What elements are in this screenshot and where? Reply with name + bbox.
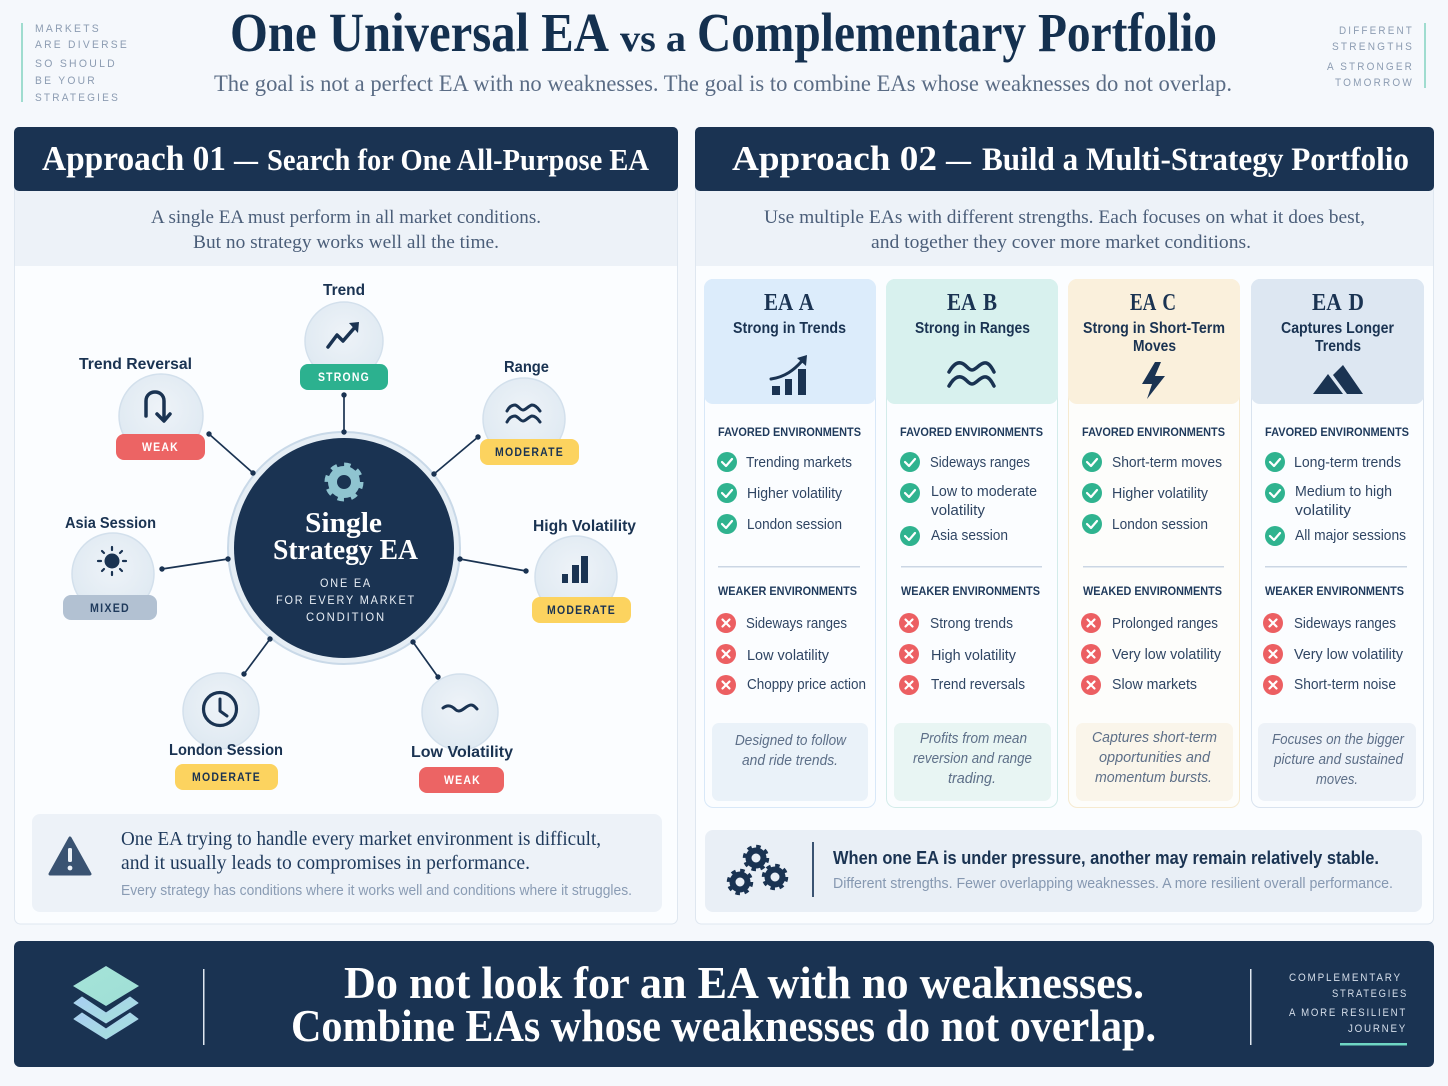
approach 01 description	[151, 207, 541, 253]
icon: trend arrow	[328, 322, 359, 347]
title: One Universal EA	[230, 2, 609, 63]
icon: rising bars	[771, 355, 807, 395]
footer side note: A MORE RESILIENT	[1289, 1007, 1407, 1019]
card: EA D: moves.	[1316, 772, 1358, 788]
card: EA C: WEAKED ENVIRONMENTS	[1083, 586, 1222, 598]
right side note: TOMORROW	[1335, 77, 1414, 89]
right side note: STRENGTHS	[1332, 41, 1414, 53]
card: EA D: Very low volatility	[1294, 646, 1403, 663]
node: trend reversal: Trend Reversal	[79, 356, 192, 373]
approach 02 heading: Build a Multi-Strategy Portfolio	[982, 142, 1409, 178]
central hub: single strategy EA: CONDITION	[306, 610, 386, 624]
card: EA A: Strong in Trends	[733, 320, 846, 337]
approach 01 description: But no strategy works well all the time.	[193, 232, 499, 253]
callout: warning	[32, 814, 662, 912]
title: vs a	[620, 18, 686, 60]
card: EA B	[886, 279, 1058, 808]
node: asia session: Asia Session	[65, 515, 156, 532]
approach 01 heading: Search for One All-Purpose EA	[267, 142, 650, 177]
node: high volatility: High Volatility	[533, 518, 636, 535]
card: EA C: EA C	[1130, 290, 1176, 316]
card: EA D: All major sessions	[1295, 527, 1406, 544]
card: EA B: Strong in Ranges	[915, 320, 1030, 337]
card: EA C: London session	[1112, 516, 1208, 533]
node: high volatility: MODERATE	[547, 603, 616, 617]
icon: low wave	[443, 705, 477, 711]
node: range: Range	[504, 359, 549, 376]
card: EA A: London session	[747, 516, 842, 533]
card: EA C: Captures short-term	[1092, 730, 1217, 746]
right side note: DIFFERENT	[1339, 25, 1414, 37]
right side note	[1327, 23, 1426, 89]
icon: bars	[562, 556, 588, 583]
node: low volatility: WEAK	[444, 773, 481, 787]
callout: warning: Every strategy has conditions where it works well and conditions where it struggles.	[121, 883, 632, 899]
footer message: Combine EAs whose weaknesses do not overlap.	[291, 1000, 1156, 1051]
icon: three gears	[728, 846, 786, 894]
central hub: single strategy EA: Single	[305, 507, 382, 539]
icon: range waves	[507, 405, 540, 422]
footer message	[291, 957, 1156, 1051]
card: EA D: Sideways ranges	[1294, 615, 1396, 632]
card: EA C: opportunities and	[1099, 750, 1211, 766]
card: EA A: Low volatility	[747, 647, 829, 664]
card: EA D: EA D	[1312, 290, 1364, 316]
approach 02 heading: —	[945, 144, 972, 177]
approach 02 description: and together they cover more market conditions.	[871, 232, 1251, 253]
card: EA A: Sideways ranges	[746, 615, 847, 632]
title: Complementary Portfolio	[697, 2, 1217, 63]
callout: resilience	[705, 830, 1422, 912]
node: trend	[300, 282, 388, 390]
subtitle: The goal is not a perfect EA with no weaknesses. The goal is to combine EAs whose weaknesses do not overlap.	[214, 71, 1232, 96]
icon: hub gear	[327, 465, 361, 499]
node: london session: London Session	[169, 742, 283, 759]
icon: u-turn arrow	[146, 392, 170, 421]
card: EA B: WEAKER ENVIRONMENTS	[901, 586, 1040, 598]
left side note	[21, 23, 129, 104]
icon: sun	[98, 547, 126, 575]
card: EA A: Choppy price action	[747, 676, 866, 693]
card: EA D: Trends	[1315, 338, 1361, 355]
central hub: single strategy EA: Strategy EA	[273, 534, 418, 566]
icon: waves	[949, 363, 994, 386]
node: trend reversal: WEAK	[142, 440, 179, 454]
icon: mountains	[1313, 365, 1363, 394]
footer side note: COMPLEMENTARY	[1289, 972, 1402, 984]
central hub: single strategy EA: ONE EA	[320, 576, 372, 590]
approach 01 description: A single EA must perform in all market conditions.	[151, 207, 541, 228]
node: trend: Trend	[323, 282, 365, 299]
connector lines	[159, 392, 529, 680]
card: EA D: WEAKER ENVIRONMENTS	[1265, 586, 1404, 598]
card: EA D: Medium to high	[1295, 483, 1392, 500]
node: range	[480, 359, 579, 465]
card: EA B: volatility	[931, 502, 985, 519]
approach 01 heading: —	[233, 144, 259, 177]
card: EA C: Short-term moves	[1112, 454, 1222, 471]
card: EA B: Sideways ranges	[930, 454, 1030, 471]
node: asia session	[63, 515, 157, 620]
card: EA D: Short-term noise	[1294, 676, 1396, 693]
card: EA A: WEAKER ENVIRONMENTS	[718, 586, 857, 598]
card: EA C: Prolonged ranges	[1112, 615, 1218, 632]
left side note: SO SHOULD	[35, 58, 117, 70]
card: EA B: reversion and range	[913, 751, 1032, 767]
callout: warning: and it usually leads to compromises in performance.	[121, 852, 530, 874]
card: EA B: Trend reversals	[931, 676, 1025, 693]
approach 02 description	[764, 207, 1365, 253]
card: EA B: Profits from mean	[920, 731, 1027, 747]
footer banner	[14, 941, 1434, 1067]
card: EA C	[1068, 279, 1240, 808]
card: EA B: Low to moderate	[931, 483, 1037, 500]
card: EA B: Strong trends	[930, 615, 1013, 632]
card: EA D: Captures Longer	[1281, 320, 1394, 337]
card: EA B: FAVORED ENVIRONMENTS	[900, 427, 1043, 439]
panel: approach 02	[695, 127, 1434, 924]
central hub: single strategy EA: FOR EVERY MARKET	[276, 593, 416, 607]
title	[230, 2, 1217, 63]
callout: resilience: Different strengths. Fewer overlapping weaknesses. A more resilient overall performance.	[833, 875, 1393, 892]
card: EA D: FAVORED ENVIRONMENTS	[1265, 427, 1409, 439]
card: EA C: momentum bursts.	[1095, 770, 1212, 786]
node: trend: STRONG	[318, 370, 370, 384]
card: EA B: Asia session	[931, 527, 1008, 544]
card: EA A	[704, 279, 876, 808]
card: EA B: High volatility	[931, 647, 1016, 664]
footer side note	[1289, 972, 1408, 1046]
card: EA C: Strong in Short-Term	[1083, 320, 1225, 337]
central hub: single strategy EA	[228, 432, 460, 664]
card: EA A: Higher volatility	[747, 485, 842, 502]
left side note: BE YOUR	[35, 75, 97, 87]
node: london session: MODERATE	[192, 770, 261, 784]
icon: clock	[204, 692, 236, 726]
card: EA C: FAVORED ENVIRONMENTS	[1082, 427, 1225, 439]
footer side note: STRATEGIES	[1332, 988, 1408, 1000]
card: EA A: FAVORED ENVIRONMENTS	[718, 427, 861, 439]
card: EA B: EA B	[947, 290, 997, 316]
approach 01 heading	[14, 127, 678, 191]
right side note: A STRONGER	[1327, 61, 1414, 73]
card: EA A: and ride trends.	[742, 753, 838, 769]
node: london session	[169, 673, 283, 790]
card: EA D: Long-term trends	[1294, 454, 1401, 471]
approach 02 heading	[695, 127, 1434, 191]
node: trend reversal	[79, 356, 205, 460]
card: EA A: EA A	[764, 290, 815, 316]
icon: lightning bolt	[1142, 362, 1165, 399]
card: EA C: Very low volatility	[1112, 646, 1221, 663]
node: range: MODERATE	[495, 445, 564, 459]
callout: resilience: When one EA is under pressure, another may remain relatively stable.	[833, 848, 1379, 868]
card: EA C: Moves	[1133, 338, 1176, 355]
approach 01 heading: Approach 01	[42, 139, 226, 178]
card: EA C: Higher volatility	[1112, 485, 1208, 502]
node: low volatility: Low Volatility	[411, 744, 513, 761]
approach 02 description: Use multiple EAs with different strengths. Each focuses on what it does best,	[764, 207, 1365, 228]
footer side note: JOURNEY	[1348, 1023, 1407, 1035]
card: EA A: Trending markets	[746, 454, 852, 471]
card: EA A: Designed to follow	[735, 733, 847, 749]
footer message: Do not look for an EA with no weaknesses.	[344, 957, 1144, 1008]
approach 02 heading: Approach 02	[732, 139, 937, 178]
card: EA D: picture and sustained	[1273, 752, 1404, 768]
left side note: STRATEGIES	[35, 92, 120, 104]
node: asia session: MIXED	[90, 601, 130, 615]
card: EA D	[1251, 279, 1424, 808]
left side note: ARE DIVERSE	[35, 39, 129, 51]
card: EA C: Slow markets	[1112, 676, 1197, 693]
left side note: MARKETS	[35, 23, 101, 35]
node: low volatility	[411, 674, 513, 793]
callout: warning: One EA trying to handle every market environment is difficult,	[121, 828, 601, 850]
card: EA B: trading.	[948, 771, 996, 787]
card: EA D: Focuses on the bigger	[1272, 732, 1405, 748]
node: high volatility	[532, 518, 636, 623]
icon: stacked layers	[73, 966, 139, 1039]
icon: warning triangle	[50, 838, 90, 874]
card: EA D: volatility	[1295, 502, 1352, 519]
panel: approach 01	[14, 127, 678, 924]
